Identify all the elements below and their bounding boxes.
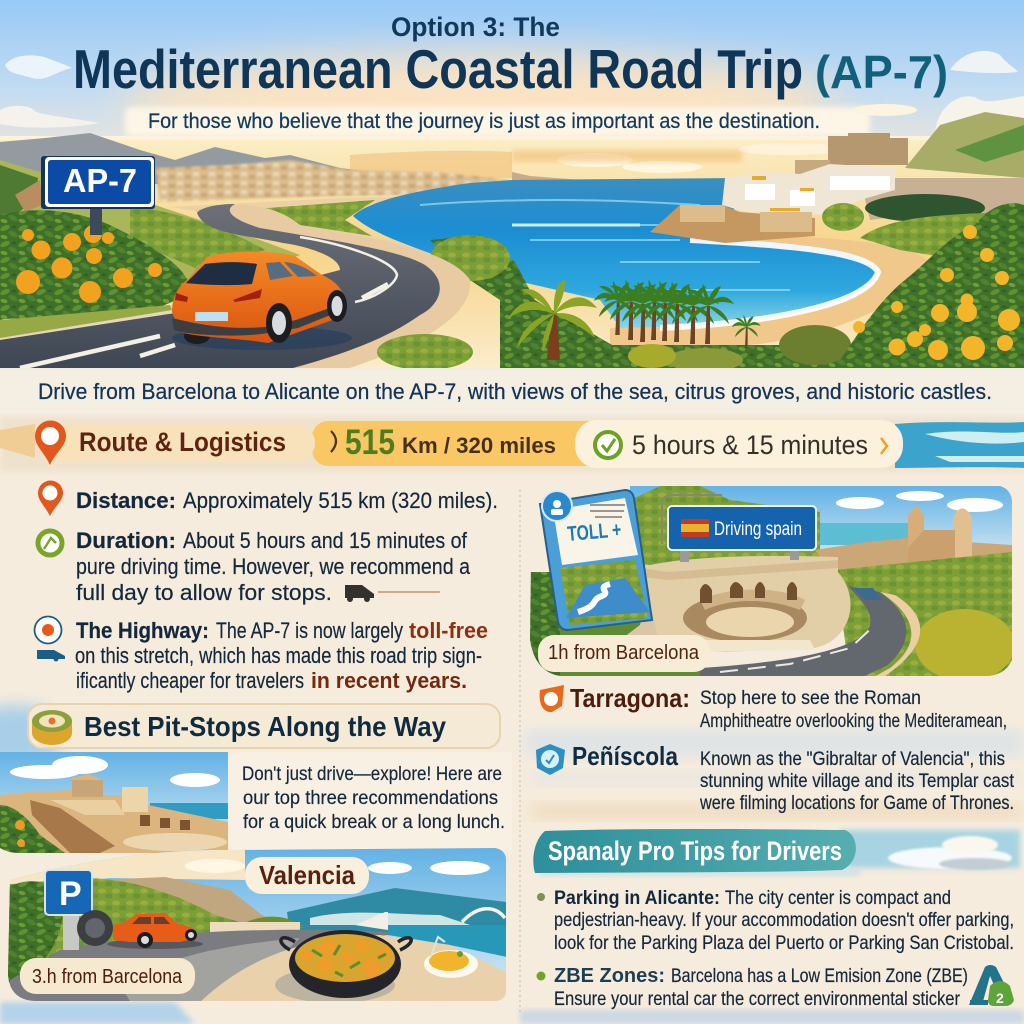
tip: parking: Parking in Alicante: [554, 888, 720, 909]
item: the highway: ificantly cheaper for travelers [76, 668, 304, 693]
stop: Tarragona [540, 683, 1007, 732]
palm trees [509, 280, 761, 360]
icon: parking sign: P [59, 875, 82, 913]
beach and foam [610, 236, 930, 345]
Valencia label: Valencia [259, 860, 355, 890]
item: the highway: on this stretch, which has made this road trip sign- [75, 643, 482, 668]
distance label [20, 958, 195, 994]
pit-stop image: coastal fort [0, 752, 228, 854]
item: duration [38, 528, 470, 605]
hillside behind road [0, 160, 300, 280]
stop: Peñíscola [536, 741, 1014, 814]
plate of paella [424, 937, 478, 978]
item: distance: Distance: [76, 488, 176, 513]
sand behind the road [172, 197, 431, 254]
item: the highway: The Highway: [76, 618, 209, 643]
distant mountains [0, 133, 362, 184]
title: Option 3: The [391, 12, 560, 42]
intro text bubble: our top three recommendations [243, 787, 498, 809]
subtitle: For those who believe that the journey is just as important as the destination. [148, 110, 820, 133]
intro sentence: Drive from Barcelona to Alicante on the AP-7, with views of the sea, citrus groves, and historic castles. [38, 379, 992, 404]
toll card graphic [540, 490, 652, 630]
icon: orange ring [540, 685, 564, 712]
Tarragona image panel [530, 484, 1015, 681]
Valencia label [245, 857, 369, 894]
winding road [700, 586, 906, 678]
item: distance: Approximately 515 km (320 miles). [183, 488, 498, 513]
logistics list [34, 480, 498, 693]
coastal city [155, 160, 510, 202]
tip: parking: The city center is compact and [725, 887, 951, 909]
sea edge of bar [895, 422, 1024, 468]
paella pan [281, 930, 411, 998]
small orange car [107, 913, 203, 949]
citrus tree, left [0, 210, 190, 338]
item: the highway: The AP-7 is now largely [216, 618, 404, 643]
sky header with clouds [0, 0, 1024, 145]
tip: ZBE zones: ZBE Zones: [554, 965, 665, 987]
stat pill: distance: Km / 320 miles [402, 433, 556, 458]
icon: parking sign [45, 870, 113, 950]
item: duration: About 5 hours and 15 minutes of [183, 528, 468, 553]
distance label: 3.h from Barcelona [32, 966, 183, 988]
AP-7 road sign [41, 156, 155, 235]
route heading pill: Route & Logistics [79, 427, 286, 457]
tip: ZBE zones: Ensure your rental car the correct environmental sticker [554, 988, 960, 1010]
road [195, 205, 470, 368]
Driving spain sign [662, 495, 816, 562]
pit-stops heading banner [28, 704, 500, 748]
stop: Tarragona: Stop here to see the Roman [700, 687, 921, 709]
hero illustration: coastal road [0, 112, 1024, 372]
icon: ZBE badge: 2 [996, 990, 1004, 1006]
sea [353, 178, 878, 328]
title [73, 12, 948, 100]
intro text bubble: Don't just drive—explore! Here are [242, 763, 502, 785]
white town and castle [905, 112, 1024, 178]
route and logistics bar [0, 416, 1024, 472]
item: duration: full day to allow for stops. [76, 580, 332, 605]
toll card graphic: TOLL + [566, 518, 622, 546]
amphitheatre [644, 556, 850, 652]
item: duration: Duration: [76, 528, 176, 553]
item: distance [38, 480, 498, 516]
stop: Peñíscola: Peñíscola [572, 741, 678, 771]
item: the highway [34, 616, 488, 693]
distance label: 1h from Barcelona [548, 642, 700, 664]
stop: Tarragona: Tarragona: [570, 683, 690, 713]
title: (AP-7) [815, 46, 948, 98]
icon: map pin [35, 420, 66, 465]
icon: ZBE badge [969, 965, 1014, 1006]
Driving spain sign: Driving spain [714, 519, 802, 540]
orange car [172, 252, 352, 350]
stat pill: duration [575, 420, 903, 468]
pro tips banner [533, 829, 1020, 876]
AP-7 road sign: AP-7 [63, 162, 137, 199]
intro text bubble [228, 752, 512, 850]
stat pill: duration: 5 hours & 15 minutes [632, 430, 868, 460]
icon: paella dish [32, 710, 72, 745]
foreground bush [377, 334, 473, 370]
route heading pill [45, 424, 315, 462]
item: the highway: in recent years. [311, 668, 467, 693]
tip: parking [537, 887, 1014, 954]
stat pill: distance [312, 421, 602, 466]
item: the highway: toll-free [409, 618, 488, 643]
intro text bubble: for a quick break or a long lunch. [243, 811, 505, 833]
pit-stop image: Valencia [0, 848, 512, 1003]
vegetation near the palm [430, 235, 860, 368]
tip: ZBE zones [536, 965, 968, 1010]
pro tips list [536, 887, 1014, 1010]
item: duration: pure driving time. However, we recommend a [76, 554, 470, 579]
citrus tree, right [835, 203, 1024, 368]
icon: blue shield [536, 744, 565, 775]
title: Mediterranean Coastal Road Trip [73, 38, 803, 100]
stat pill: distance: 515 [345, 423, 395, 462]
pro tips banner: Spanaly Pro Tips for Drivers [548, 836, 842, 866]
pit-stops heading banner: Best Pit-Stops Along the Way [84, 711, 446, 742]
church towers [908, 505, 972, 562]
column divider [519, 490, 521, 1012]
tip: ZBE zones: Barcelona has a Low Emision Zone (ZBE) [671, 965, 968, 987]
distance label [538, 635, 710, 672]
